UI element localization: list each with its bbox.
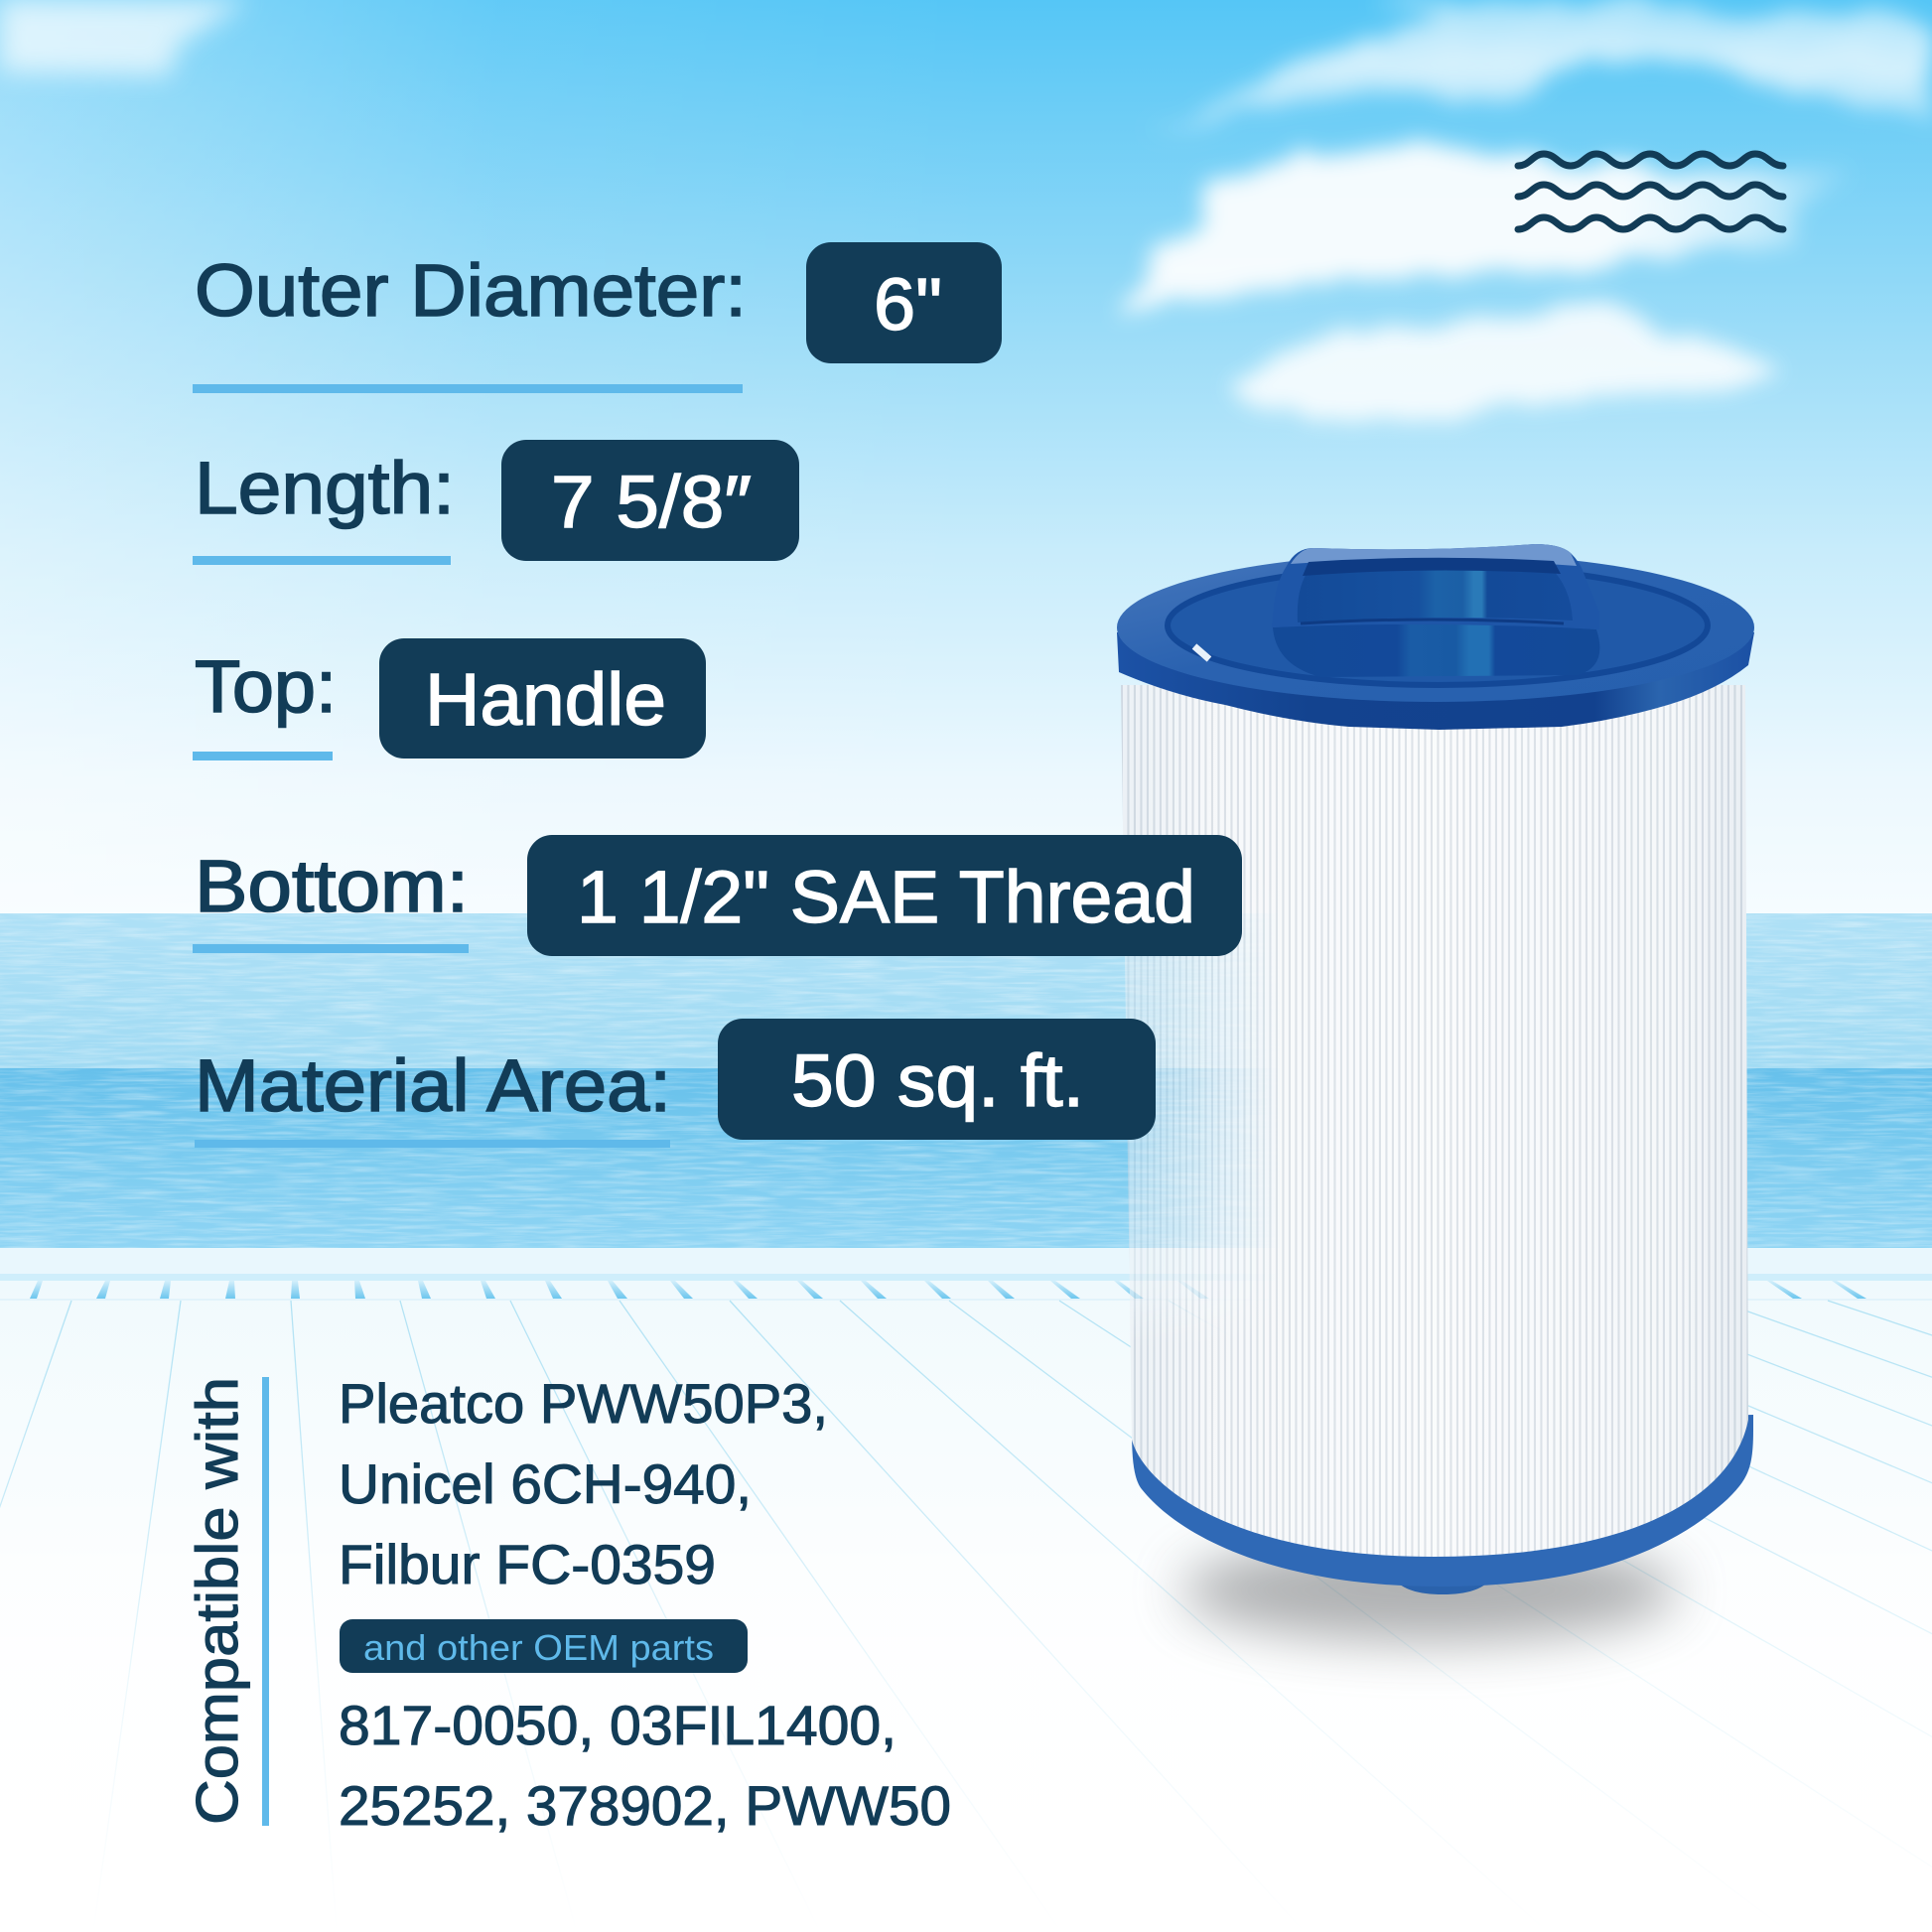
- spec: top: Top:: [195, 645, 337, 728]
- compatible models: Unicel 6CH-940,: [339, 1452, 752, 1515]
- spec: bottom: [193, 835, 1242, 956]
- compatible models: Filbur FC-0359: [339, 1533, 716, 1595]
- OEM parts tag: [340, 1619, 748, 1673]
- vertical divider: [262, 1377, 269, 1826]
- bottom stub: [1394, 1579, 1491, 1594]
- OEM part numbers: 817-0050, 03FIL1400,: [339, 1694, 897, 1756]
- filter shadow: [1181, 1539, 1678, 1642]
- spec: material area: Material Area:: [195, 1044, 671, 1127]
- product: pool filter cartridge: [1112, 544, 1757, 1642]
- OEM part numbers: 25252, 378902, PWW50: [339, 1774, 951, 1837]
- OEM part numbers: [339, 1694, 951, 1837]
- background: sky: [0, 0, 1932, 918]
- clouds: [0, 0, 1932, 420]
- spec: material area: [195, 1019, 1156, 1148]
- top cap rim: [1117, 632, 1754, 730]
- spec: length: 7 5/8″: [551, 461, 752, 543]
- OEM parts tag: and other OEM parts: [363, 1627, 714, 1668]
- icon: water waves: [1518, 154, 1783, 229]
- spec: bottom: 1 1/2" SAE Thread: [577, 856, 1195, 938]
- handle reflection: [1273, 622, 1599, 677]
- spec: top: Handle: [425, 658, 666, 741]
- bottom cap ring: [1132, 1415, 1753, 1587]
- handle outer: [1272, 544, 1599, 629]
- pleated filter body: [1112, 675, 1757, 1569]
- spec: outer diameter: Outer Diameter:: [195, 249, 747, 332]
- handle: [1272, 544, 1599, 629]
- spec: length: Length:: [195, 447, 455, 529]
- spec: outer diameter: 6": [874, 263, 942, 345]
- spec: length: [193, 440, 799, 565]
- vertical heading: Compatible with: [185, 1377, 250, 1825]
- inner groove: [1168, 566, 1708, 685]
- compatibility section: [185, 1372, 951, 1837]
- white glint: [1194, 646, 1209, 659]
- compatible models: [339, 1372, 828, 1595]
- spec: material area: 50 sq. ft.: [791, 1039, 1084, 1122]
- handle base shadow line: [1301, 620, 1564, 623]
- handle window: [1298, 562, 1573, 622]
- sea: [0, 913, 1932, 1249]
- handle window top shadow: [1303, 558, 1561, 576]
- compatible models: Pleatco PWW50P3,: [339, 1372, 828, 1435]
- spec: bottom: Bottom:: [195, 845, 469, 927]
- top cap surface: [1117, 553, 1754, 702]
- spec: outer diameter: [193, 242, 1002, 393]
- pool deck: [0, 1248, 1932, 1932]
- handle top highlight: [1291, 544, 1577, 566]
- spec: top: [193, 638, 706, 760]
